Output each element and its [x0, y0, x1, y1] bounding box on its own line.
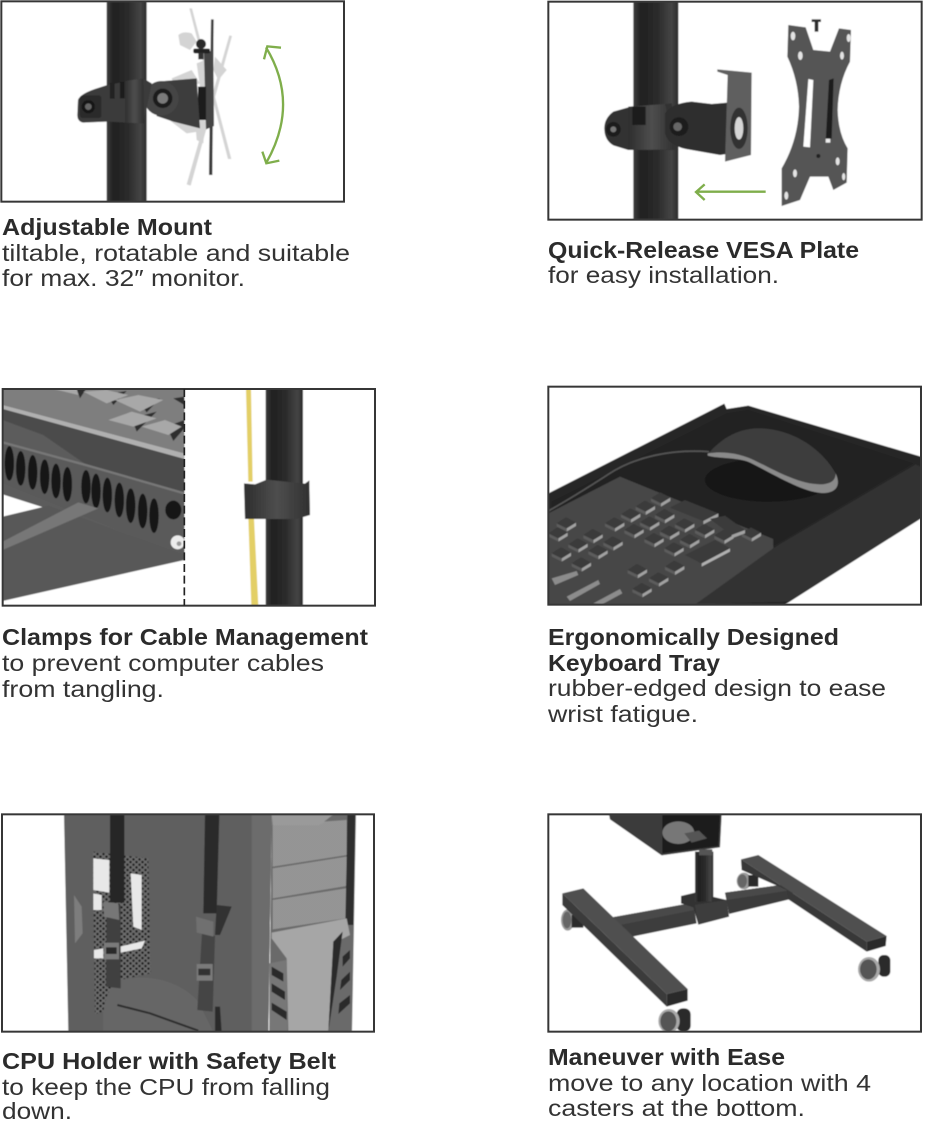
- heading line 2: Keyboard Tray: [548, 650, 720, 676]
- description line 2: for max. 32″ monitor.: [2, 265, 245, 291]
- panel: maneuver with ease: [548, 814, 921, 1121]
- dashed divider: [182, 389, 187, 606]
- description line 2: wrist fatigue.: [547, 701, 698, 727]
- description line 1: move to any location with 4: [548, 1070, 871, 1096]
- panel: ergonomic keyboard tray: [547, 387, 921, 727]
- photo: keyboard tray with mouse: [548, 387, 921, 605]
- icon: curved green tilt arrow: [262, 46, 283, 163]
- frame: [548, 387, 921, 605]
- photo: cable clamps on tray and pole: [3, 389, 375, 606]
- photo: PC case with safety belts: [2, 814, 374, 1032]
- frame: [3, 389, 375, 606]
- frame: [548, 814, 921, 1032]
- description line 1: to keep the CPU from falling: [2, 1074, 330, 1100]
- description line 1: to prevent computer cables: [2, 650, 324, 676]
- panel: clamps for cable management: [2, 389, 375, 702]
- heading: CPU Holder with Safety Belt: [2, 1048, 336, 1074]
- panel: adjustable mount: [1, 1, 350, 291]
- panel: CPU holder: [2, 814, 374, 1121]
- frame: [548, 2, 922, 220]
- heading: Quick-Release VESA Plate: [548, 237, 859, 263]
- panel: quick-release VESA plate: [548, 2, 922, 288]
- description line 1: tiltable, rotatable and suitable: [2, 240, 350, 266]
- photo: VESA plate and bracket: [548, 2, 922, 220]
- description: for easy installation.: [548, 262, 779, 288]
- description line 1: rubber-edged design to ease: [548, 675, 886, 701]
- description line 2: casters at the bottom.: [548, 1095, 805, 1121]
- icon: green left arrow: [696, 184, 766, 200]
- heading: Maneuver with Ease: [548, 1044, 785, 1070]
- frame: [2, 814, 374, 1032]
- heading: Adjustable Mount: [2, 214, 212, 240]
- photo: caster base: [548, 814, 921, 1033]
- heading: Clamps for Cable Management: [2, 624, 368, 650]
- description line 2: from tangling.: [2, 676, 164, 702]
- frame: [1, 1, 344, 202]
- photo: tilting monitor mount: [1, 1, 344, 202]
- heading line 1: Ergonomically Designed: [548, 624, 839, 650]
